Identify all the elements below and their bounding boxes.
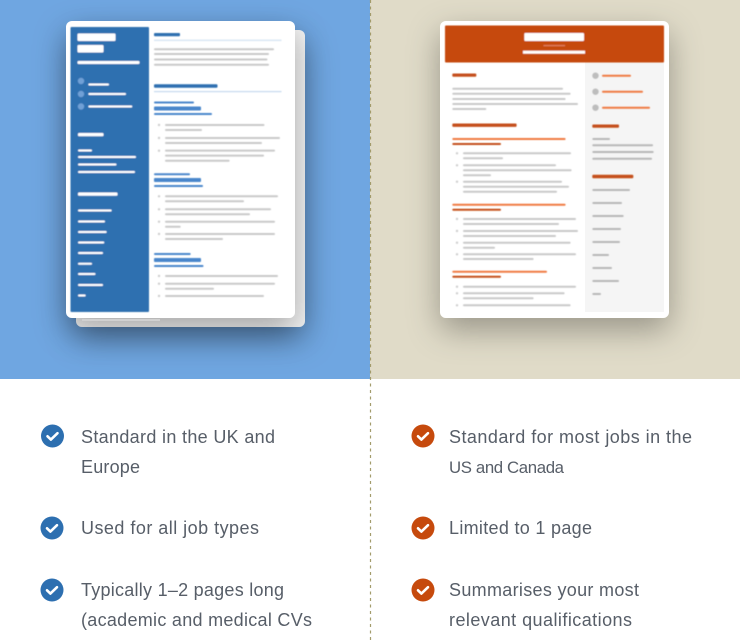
- side section two: [592, 175, 633, 295]
- item: limited to 1 page: Limited to 1 page: [449, 518, 592, 538]
- icon: orange check 1: [412, 424, 434, 448]
- job two: [452, 204, 578, 260]
- resume main column: [452, 74, 578, 306]
- item: typically 1-2 pages long: Typically 1–2 pages long: [81, 580, 284, 600]
- sidebar section two: [78, 192, 118, 296]
- sidebar contact icons: [78, 78, 84, 110]
- item: used for all job types: Used for all job types: [81, 518, 259, 538]
- front page: [66, 21, 295, 318]
- experience heading: [452, 124, 517, 127]
- page: [440, 21, 669, 318]
- resume header: [445, 26, 664, 62]
- sidebar contact lines: [88, 84, 132, 108]
- icon: blue check 1: [41, 424, 64, 448]
- item: standard for most jobs: [449, 427, 692, 477]
- sidebar section one: [78, 133, 136, 173]
- panel: beige background: [370, 0, 740, 379]
- item: typically 1-2 pages long: [81, 580, 312, 630]
- CV sidebar: [70, 27, 149, 312]
- experience heading: [154, 84, 218, 88]
- back page: [76, 30, 305, 327]
- icon: orange check 2: [412, 516, 434, 540]
- contact icons: [592, 72, 599, 111]
- sidebar name block: [78, 34, 140, 64]
- job three: [452, 271, 576, 306]
- back page text strip: [82, 319, 160, 321]
- profile heading: [154, 33, 180, 36]
- job two: [154, 173, 278, 240]
- panel: blue background: [0, 0, 370, 379]
- job three: [154, 253, 278, 297]
- item: summarises qualifications: [449, 580, 639, 630]
- contact lines: [602, 75, 650, 109]
- item: standard in the UK and Europe: [81, 427, 275, 477]
- dashed divider: [370, 0, 372, 640]
- CV document illustration: [66, 21, 305, 327]
- side section one: [592, 124, 654, 160]
- summary text: [452, 88, 578, 110]
- resume list: [412, 424, 692, 630]
- job one: [154, 102, 280, 162]
- item: typically 1-2 pages long: (academic and medical CVs: [81, 610, 312, 630]
- item: summarises qualifications: relevant qualifications: [449, 610, 632, 630]
- icon: orange check 3: [412, 578, 434, 602]
- item: summarises qualifications: Summarises your most: [449, 580, 639, 600]
- resume side column: [592, 72, 654, 295]
- profile text: [154, 48, 274, 66]
- icon: blue check 3: [40, 578, 64, 602]
- item: standard for most jobs: US and Canada: [449, 458, 565, 477]
- job one: [452, 138, 572, 193]
- resume side panel: [585, 62, 664, 312]
- item: standard in the UK and Europe: Standard in the UK and: [81, 427, 275, 447]
- CV main column: [154, 33, 282, 297]
- item: standard in the UK and Europe: Europe: [81, 457, 140, 477]
- icon: blue check 2: [40, 516, 64, 540]
- CV list: [40, 424, 312, 630]
- item: standard for most jobs: Standard for most jobs in the: [449, 427, 692, 447]
- resume document illustration: [440, 21, 669, 318]
- summary heading: [452, 74, 476, 77]
